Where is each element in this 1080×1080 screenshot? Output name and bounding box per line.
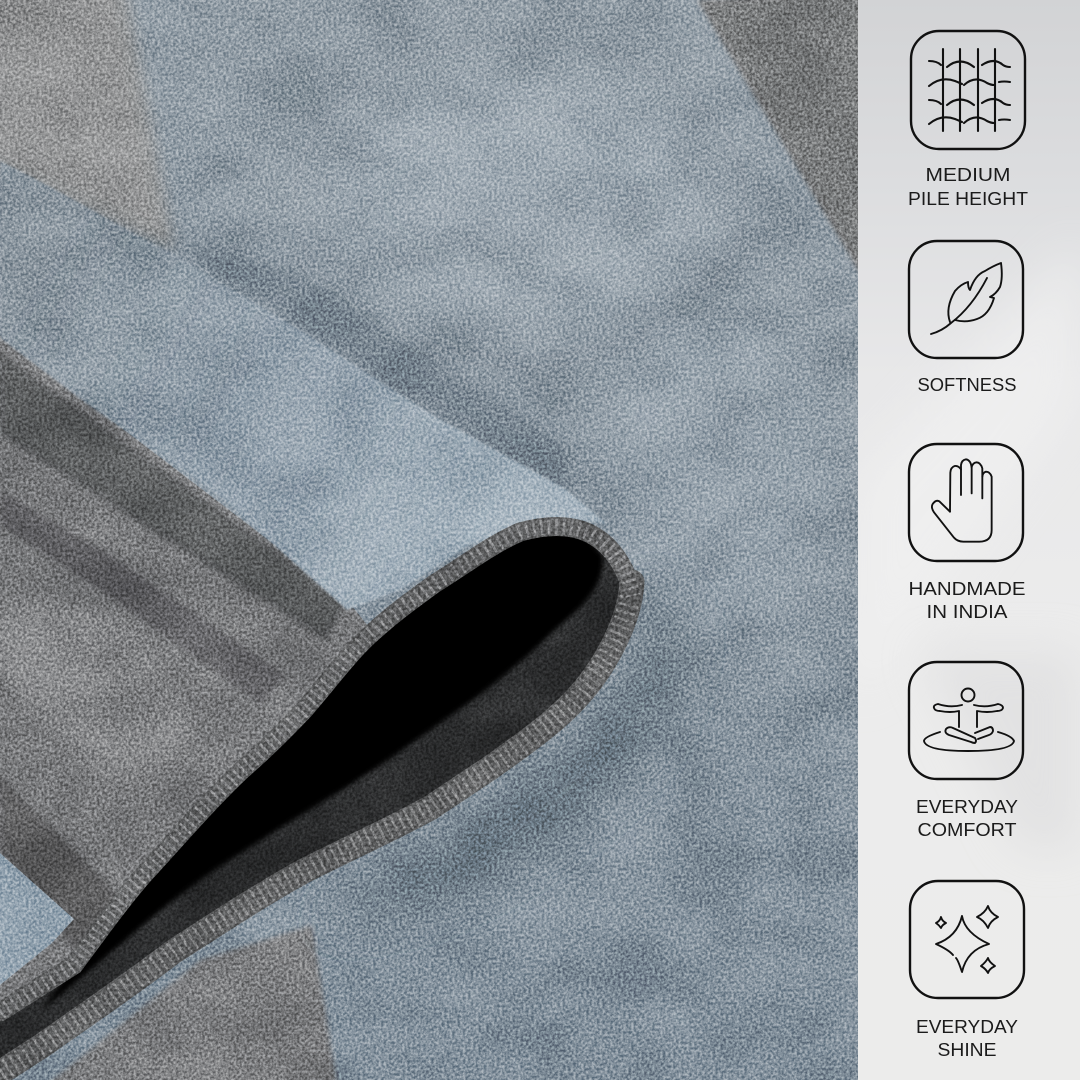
feature: medium pile height xyxy=(911,31,1025,149)
rug floor surface xyxy=(0,0,858,1080)
lower edge: cord xyxy=(0,582,632,1076)
roll: light grey patch xyxy=(0,600,186,760)
floor: shadow along roll top xyxy=(175,245,570,495)
right feature panel xyxy=(858,0,1080,1080)
feature: handmade in india xyxy=(909,444,1023,561)
floor: pale patch right xyxy=(617,329,822,614)
floor: soft shadow beside roll xyxy=(320,580,682,925)
label: medium pile height: PILE HEIGHT xyxy=(908,188,1028,209)
label: handmade in india: IN INDIA xyxy=(926,601,1008,622)
icon frame: softness xyxy=(909,241,1023,358)
label: everyday shine: EVERYDAY xyxy=(916,1016,1018,1037)
icon frame: handmade xyxy=(909,444,1023,561)
icon frame: comfort xyxy=(909,662,1023,779)
feature: softness xyxy=(909,241,1023,358)
rug pile grain xyxy=(0,0,858,1080)
upper edge: stitches xyxy=(0,526,633,1012)
icon: sparkles xyxy=(936,906,998,973)
floor: pale patches xyxy=(330,80,710,320)
panel: grey wash xyxy=(962,668,1062,826)
icon: meditating figure xyxy=(924,688,1014,751)
roll: upper bound edge xyxy=(0,526,633,1012)
roll: black interior xyxy=(40,530,603,1012)
icon frame: shine xyxy=(910,881,1024,998)
icon: hand xyxy=(932,459,992,542)
roll: top surface grey base xyxy=(0,335,373,1010)
floor: top-left grey stripe xyxy=(0,0,175,250)
label: handmade in india: HANDMADE xyxy=(908,578,1026,599)
label: medium pile height: MEDIUM xyxy=(926,164,1010,185)
icon frame: pile xyxy=(911,31,1025,149)
floor: top-right grey stripe xyxy=(697,0,858,273)
floor: bottom grey stripe xyxy=(40,925,338,1080)
panel background xyxy=(858,0,1080,1080)
label: everyday comfort: COMFORT xyxy=(918,819,1016,840)
label: everyday shine: SHINE xyxy=(938,1039,996,1060)
icon: pile fibres xyxy=(929,49,1010,131)
roll: dark lower stripe xyxy=(0,775,126,950)
roll: blue lower corner xyxy=(0,853,74,985)
roll: second dark stripe xyxy=(0,490,285,705)
roll: dark stripe xyxy=(0,352,347,640)
feature: everyday shine xyxy=(910,881,1024,998)
upper edge: cord xyxy=(0,526,633,1012)
label: everyday comfort: EVERYDAY xyxy=(916,796,1018,817)
panel: light diagonal streak xyxy=(858,240,1080,700)
lower edge: stitches xyxy=(0,582,632,1076)
rug tonal mottling xyxy=(0,0,858,1080)
roll: lower bound edge xyxy=(0,582,632,1076)
feature: everyday comfort xyxy=(909,662,1023,779)
label: softness: SOFTNESS xyxy=(918,374,1016,395)
roll: woven underside xyxy=(0,526,633,1072)
icon: feather xyxy=(931,263,1002,334)
panel: texture washes xyxy=(962,668,1062,826)
roll: blue top surface xyxy=(0,161,607,610)
